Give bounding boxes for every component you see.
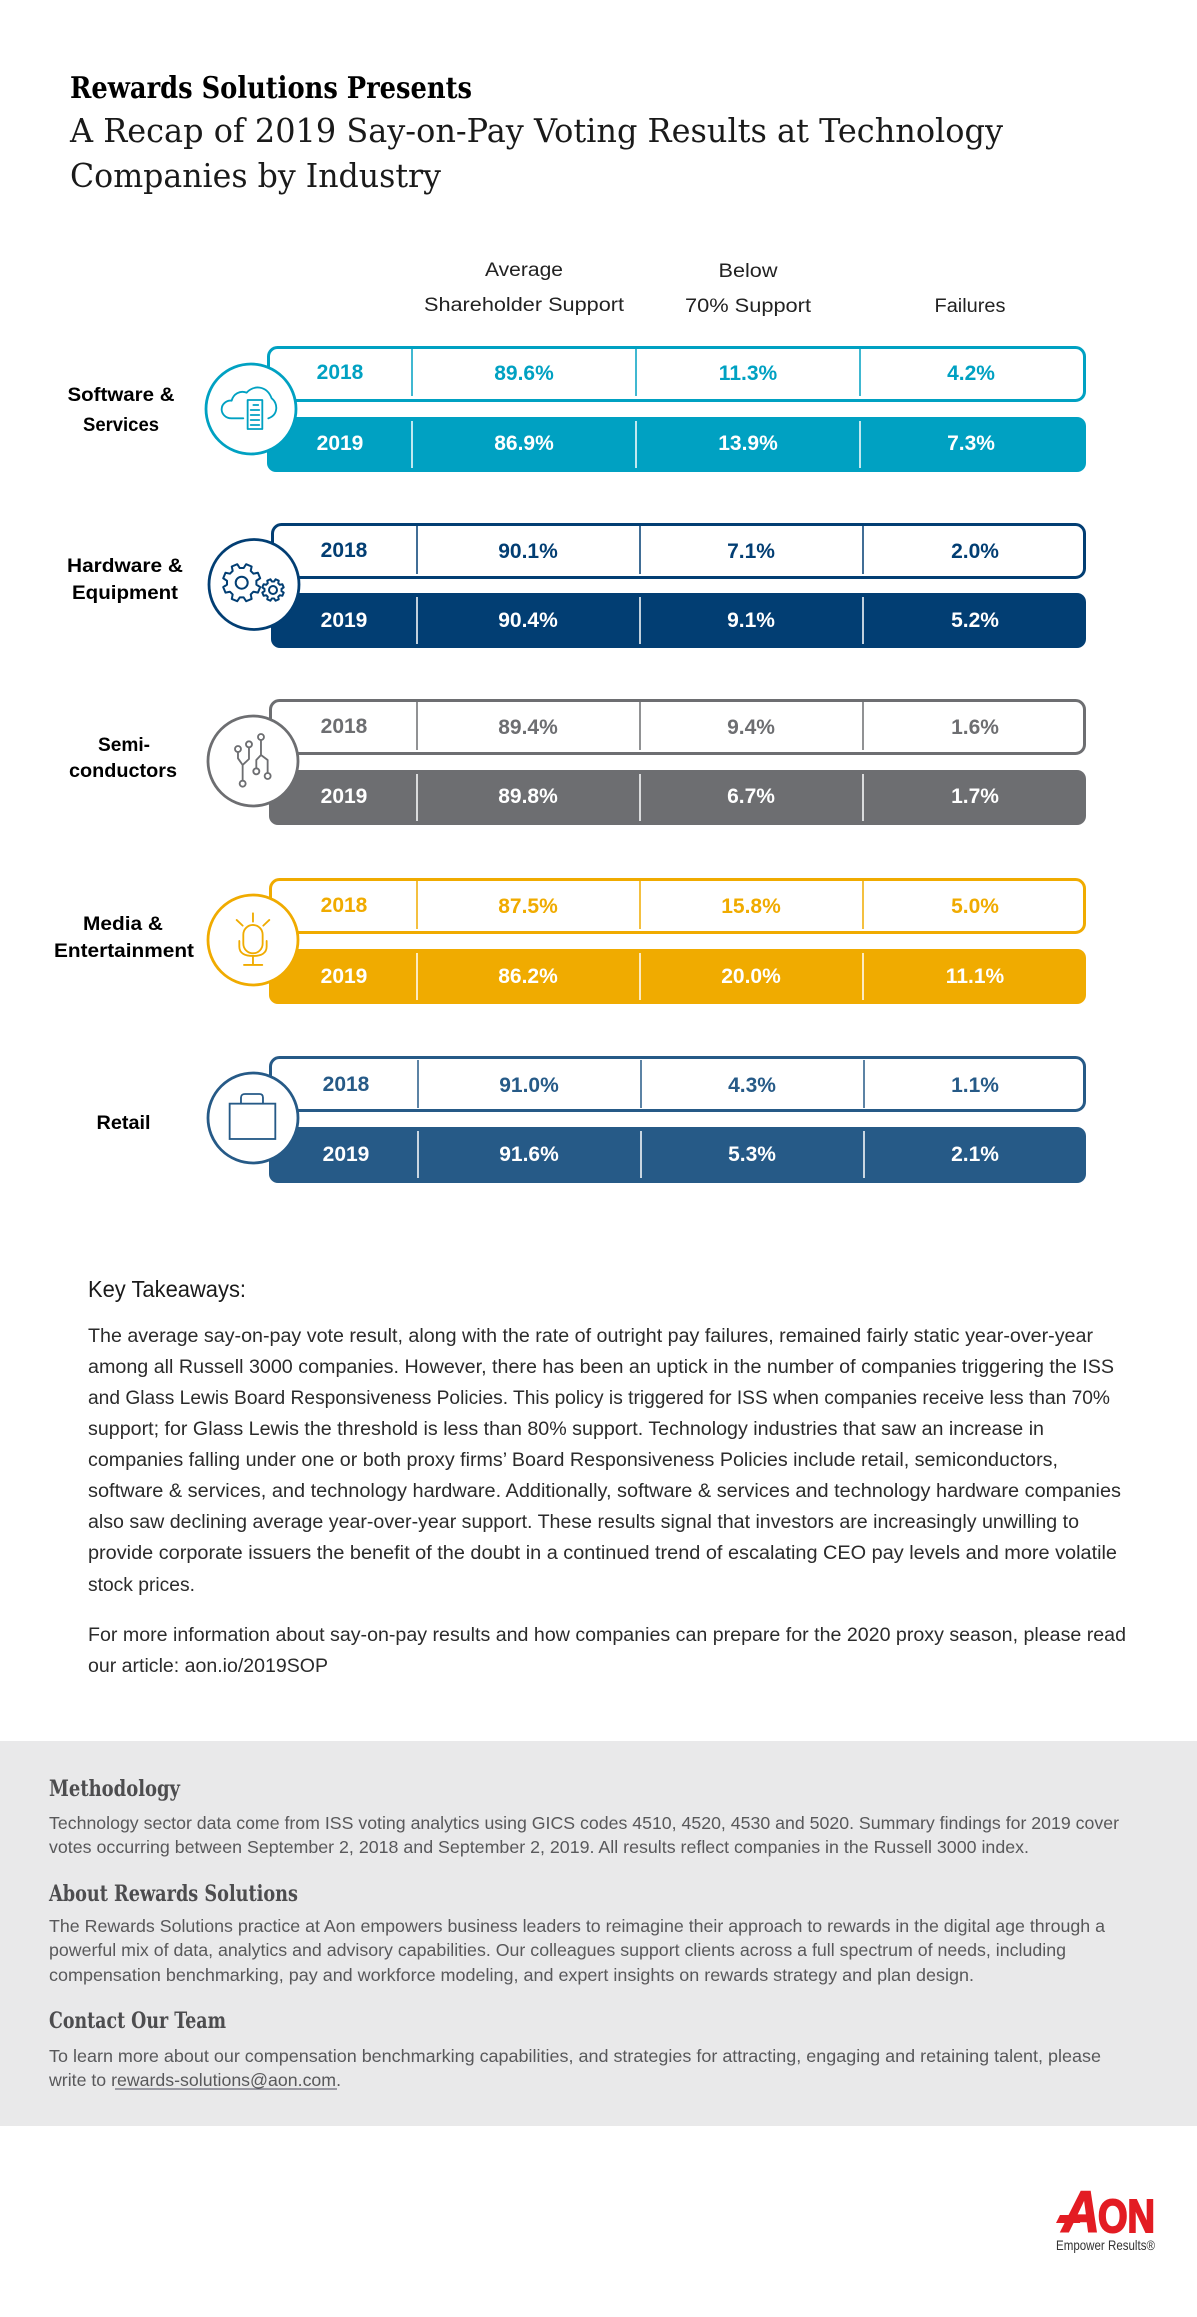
2019 row: 20.0% [721, 965, 781, 988]
text block: takeaways paragraph: and Glass Lewis Board Responsiveness Policies. This policy is triggered for ISS when companies receive less than 70% [88, 1388, 1110, 1409]
2018 row: 2018 [321, 894, 368, 917]
2019 row [271, 593, 1086, 648]
text block: methodology: votes occurring between September 2, 2018 and September 2, 2019. All results reflect companies in the Russell 3000 index. [49, 1837, 1029, 1857]
label: media and entertainment: Entertainment [54, 940, 195, 962]
2019 row: 89.8% [498, 785, 558, 808]
label: retail: Retail [96, 1112, 150, 1134]
2018 row: 2018 [321, 539, 368, 562]
icon: microphone [208, 895, 298, 985]
text block: takeaways paragraph: among all Russell 3000 companies. However, there has been an uptick in the number of companies triggering the ISS [88, 1357, 1114, 1378]
2019 row: 86.2% [498, 965, 558, 988]
2018 row: 2018 [323, 1073, 370, 1096]
label: semiconductors: Semi- [98, 734, 150, 756]
2018 row: 89.4% [498, 716, 558, 739]
2019 row: 2019 [323, 1143, 369, 1166]
title: A Recap of 2019 Say-on-Pay Voting Results at Technology [69, 111, 1003, 150]
2018 row: 9.4% [727, 716, 775, 739]
text block: about [49, 1916, 1105, 1985]
text block: takeaways paragraph: companies falling under one or both proxy firms’ Board Responsiveness Policies include retail, semiconductors, [88, 1450, 1058, 1471]
2018 row: 2018 [317, 361, 364, 384]
panel: footer information [0, 1741, 1197, 2126]
2018 row: 1.6% [951, 716, 999, 739]
2019 row [267, 417, 1086, 472]
2018 row: 5.0% [951, 895, 999, 918]
2018 row: 91.0% [499, 1074, 559, 1097]
text block: more information: our article: aon.io/2019SOP [88, 1656, 328, 1677]
2019 row [269, 949, 1086, 1004]
2018 row: 1.1% [951, 1074, 999, 1097]
2019 row: 2019 [317, 432, 363, 455]
heading: about rewards solutions: About Rewards Solutions [48, 1881, 298, 1907]
text block: more information [88, 1625, 1126, 1677]
text block: takeaways paragraph: The average say-on-pay vote result, along with the rate of outright pay failures, remained fairly static year-over-year [88, 1326, 1094, 1347]
2019 row: 90.4% [498, 609, 558, 632]
column headers: 70% Support [685, 296, 812, 317]
logo: Aon Empower Results: Empower Results® [1056, 2237, 1156, 2253]
label: media and entertainment: Media & [83, 913, 163, 935]
text block: takeaways paragraph [88, 1326, 1121, 1596]
label: hardware and equipment: Equipment [72, 582, 179, 604]
2018 row [270, 1058, 1084, 1110]
2019 row: 2.1% [951, 1143, 999, 1166]
label: semiconductors [69, 734, 177, 782]
heading: contact our team: Contact Our Team [49, 2008, 226, 2034]
column headers: Shareholder Support [424, 295, 625, 316]
2018 row: 87.5% [498, 895, 558, 918]
column headers [424, 260, 1006, 317]
2019 row: 86.9% [494, 432, 554, 455]
panel: retail [96, 1058, 1086, 1183]
2019 row: 5.2% [951, 609, 999, 632]
2019 row: 91.6% [499, 1143, 559, 1166]
text block: contact [48, 2046, 1101, 2090]
title [69, 71, 1003, 195]
panel: hardware and equipment [67, 524, 1086, 648]
2019 row: 9.1% [727, 609, 775, 632]
text block: contact: To learn more about our compensation benchmarking capabilities, and strategies for attracting, engaging and retaining talent, please [49, 2046, 1101, 2066]
text block: takeaways paragraph: software & services, and technology hardware. Additionally, software & services and technology hardware companies [88, 1481, 1121, 1502]
column headers: Below [718, 261, 778, 282]
logo: Aon Empower Results: ON [1098, 2190, 1155, 2242]
2019 row: 6.7% [727, 785, 775, 808]
2018 row: 4.2% [947, 362, 995, 385]
logo: Aon Empower Results [1056, 2180, 1156, 2253]
text block: takeaways paragraph: also saw declining average year-over-year support. These results signal that investors are increasingly unwilling to [88, 1512, 1079, 1533]
panel: software and services [68, 348, 1086, 472]
2018 row: 15.8% [721, 895, 781, 918]
label: hardware and equipment [67, 555, 183, 604]
text block: takeaways paragraph: support; for Glass Lewis the threshold is less than 80% support. Technology industries that saw an increase in [88, 1419, 1044, 1440]
title: Rewards Solutions Presents [70, 71, 472, 106]
text block: takeaways paragraph: provide corporate issuers the benefit of the doubt in a continued trend of escalating CEO pay levels and more volatile [88, 1543, 1117, 1564]
label: software and services: Software & [68, 384, 174, 406]
2019 row: 11.1% [946, 965, 1005, 988]
column headers: Failures [934, 296, 1006, 317]
2018 row [270, 880, 1084, 932]
label: hardware and equipment: Hardware & [67, 555, 183, 577]
2018 row [268, 348, 1084, 400]
2019 row: 5.3% [728, 1143, 776, 1166]
label: software and services [68, 384, 174, 436]
text block: methodology: Technology sector data come from ISS voting analytics using GICS codes 4510, 4520, 4530 and 5020. Summary findings for 2019 cover [49, 1813, 1119, 1833]
2019 row [269, 770, 1086, 825]
label: media and entertainment [54, 913, 195, 962]
2018 row: 2.0% [951, 540, 999, 563]
2018 row: 90.1% [498, 540, 558, 563]
2019 row: 7.3% [947, 432, 995, 455]
2019 row: 13.9% [718, 432, 778, 455]
key takeaways [88, 1276, 1126, 1677]
logo: Aon Empower Results: A [1060, 2180, 1100, 2245]
2019 row: 1.7% [951, 785, 999, 808]
2018 row: 4.3% [728, 1074, 776, 1097]
text block: methodology [49, 1813, 1119, 1857]
panel: semiconductors [69, 700, 1086, 825]
2018 row: 11.3% [719, 362, 778, 385]
panel: media and entertainment [54, 880, 1086, 1004]
text block: about: powerful mix of data, analytics and advisory capabilities. Our colleagues support clients across a full spectrum of needs, including [49, 1940, 1066, 1960]
icon: briefcase [208, 1073, 298, 1163]
2018 row: 7.1% [727, 540, 775, 563]
title: Companies by Industry [70, 156, 441, 195]
label: software and services: Services [83, 414, 159, 436]
2018 row [270, 700, 1084, 754]
text block: contact: write to rewards-solutions@aon.com. [48, 2070, 341, 2090]
text block: about: The Rewards Solutions practice at Aon empowers business leaders to reimagine their approach to rewards in the digital age through a [49, 1916, 1105, 1936]
2019 row [269, 1127, 1086, 1183]
text block: about: compensation benchmarking, pay and workforce modeling, and expert insights on rewards strategy and plan design. [49, 1965, 974, 1985]
text block: takeaways paragraph: stock prices. [88, 1575, 195, 1596]
heading: methodology: Methodology [49, 1776, 181, 1802]
2018 row: 89.6% [494, 362, 554, 385]
2018 row: 2018 [321, 715, 368, 738]
text block: more information: For more information about say-on-pay results and how companies can prepare for the 2020 proxy season, please read [88, 1625, 1126, 1646]
2019 row: 2019 [321, 609, 367, 632]
2019 row: 2019 [321, 965, 367, 988]
2019 row: 2019 [321, 785, 367, 808]
column headers: Average [485, 260, 563, 281]
icon: circuit [208, 716, 298, 806]
icon: gears [209, 540, 299, 630]
heading: key takeaways: Key Takeaways: [88, 1276, 246, 1302]
icon: cloud server [206, 364, 296, 454]
label: semiconductors: conductors [69, 760, 177, 782]
2018 row [272, 524, 1084, 578]
